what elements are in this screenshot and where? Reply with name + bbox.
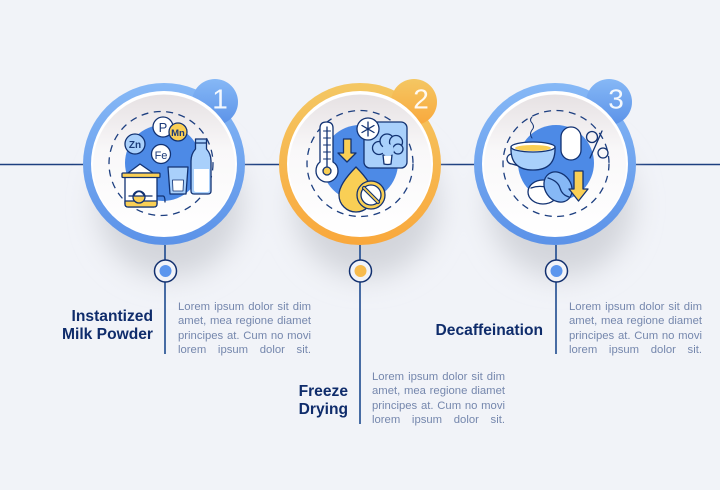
connector: step 3 bbox=[546, 245, 568, 354]
text block: step 1: lorem ipsum dolor sit. bbox=[178, 344, 311, 356]
icon: mineral badges bbox=[125, 117, 187, 164]
title: step 1: Milk Powder bbox=[62, 326, 153, 343]
title: step 3: Decaffeination bbox=[436, 322, 543, 338]
text block: step 3: lorem ipsum dolor sit. bbox=[569, 344, 702, 356]
icon: down arrow bbox=[569, 171, 588, 201]
panel: step 1 circle: 1 bbox=[212, 84, 228, 114]
icon: down arrow bbox=[338, 139, 356, 162]
text block: step 2 bbox=[372, 370, 505, 426]
panel: step 3 circle bbox=[474, 79, 636, 245]
icon: powder jar bbox=[122, 164, 165, 207]
icon: capsule bbox=[561, 127, 581, 160]
icon: coffee cup bbox=[507, 117, 555, 170]
text block: step 3: Lorem ipsum dolor sit dim bbox=[569, 300, 702, 312]
icon: thermometer bbox=[316, 122, 338, 182]
connector: step 1 bbox=[154, 245, 176, 354]
title: step 1: Instantized bbox=[72, 308, 153, 325]
icon: frozen broccoli bbox=[357, 118, 407, 168]
text block: step 3: principes at. Cum no movi bbox=[569, 330, 702, 342]
title: step 2: Drying bbox=[299, 401, 348, 418]
text block: step 2: lorem ipsum dolor sit. bbox=[372, 414, 505, 426]
horizontal timeline bbox=[0, 164, 720, 166]
icon: milk bottle bbox=[191, 139, 211, 194]
panel: step 1 circle bbox=[83, 79, 245, 245]
title: step 2: Freeze bbox=[299, 383, 348, 400]
circle shadows bbox=[98, 133, 633, 277]
text block: step 1 bbox=[178, 300, 311, 356]
text block: step 3 bbox=[569, 300, 702, 356]
text block: step 1: principes at. Cum no movi bbox=[178, 330, 311, 342]
text block: step 1: Lorem ipsum dolor sit dim bbox=[178, 300, 311, 312]
text block: step 1: amet, mea regione diamet bbox=[178, 315, 311, 327]
icon: mineral badges: Zn bbox=[129, 140, 141, 151]
icon: water drop with pill bbox=[339, 167, 385, 212]
text block: step 3: amet, mea regione diamet bbox=[569, 315, 702, 327]
text block: step 2: amet, mea regione diamet bbox=[372, 385, 505, 397]
icon: mineral badges: Mn bbox=[171, 128, 185, 139]
icon: glass of milk bbox=[168, 167, 188, 194]
icon: mineral badges: Fe bbox=[155, 150, 167, 162]
icon: coffee beans bbox=[528, 166, 578, 208]
text block: step 2: Lorem ipsum dolor sit dim bbox=[372, 370, 505, 382]
panel: step 3 circle: 3 bbox=[608, 84, 624, 114]
icon: mineral badges: P bbox=[159, 120, 167, 135]
title: step 2 bbox=[299, 383, 348, 418]
icon: percent sign bbox=[586, 131, 608, 158]
panel: step 2 circle bbox=[279, 79, 441, 245]
title: step 1 bbox=[62, 308, 153, 343]
panel: step 2 circle: 2 bbox=[413, 84, 429, 114]
connector: step 2 bbox=[350, 245, 372, 424]
text block: step 2: principes at. Cum no movi bbox=[372, 400, 505, 412]
